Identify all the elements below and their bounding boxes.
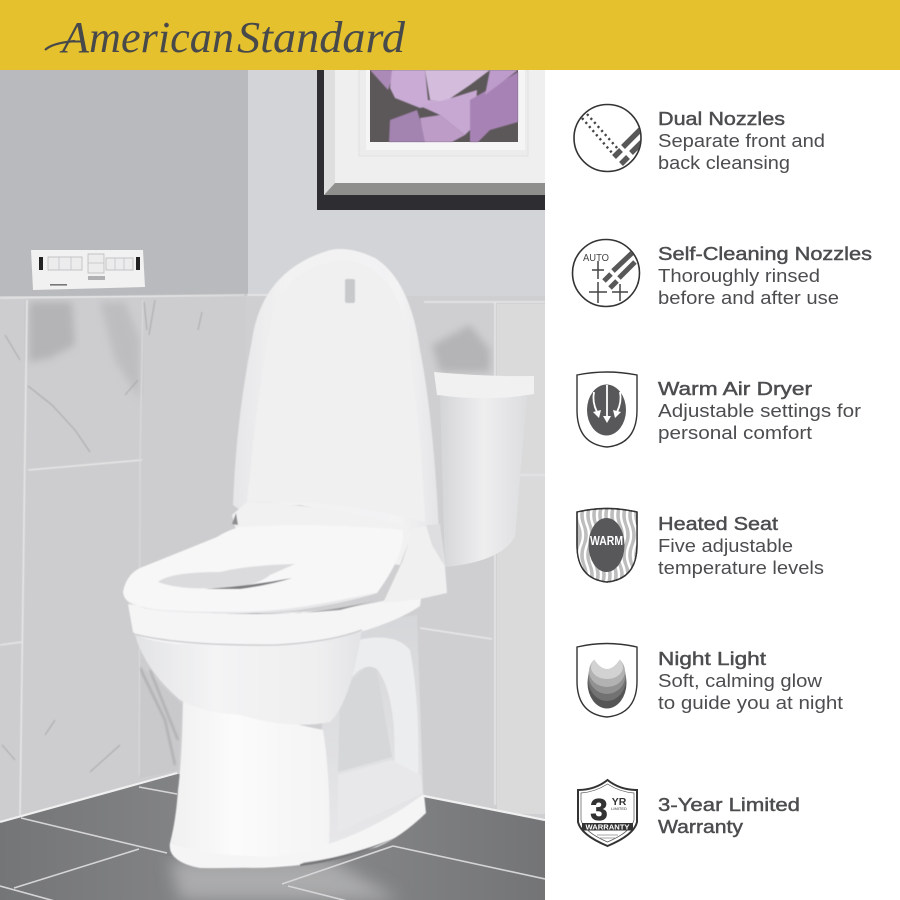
header band: [0, 0, 900, 70]
feature: warm air dryer: Warm Air Dryer: [658, 378, 812, 399]
left wall tiles: [0, 295, 248, 836]
raised lid: [233, 248, 439, 532]
feature: warranty: Warranty: [658, 816, 744, 837]
icon: heated seat: [577, 505, 637, 585]
logo: [45, 13, 406, 62]
bowl rim: [128, 598, 421, 644]
hinge housing: [384, 544, 448, 600]
icon: warranty badge: YR: [612, 796, 627, 808]
feature: night light: to guide you at night: [658, 693, 843, 713]
feature: dual nozzles: [658, 108, 825, 173]
feature: self-cleaning nozzles: [658, 243, 872, 308]
feature: warm air dryer: personal comfort: [658, 423, 812, 443]
floor: [0, 773, 545, 900]
feature: dual nozzles: Separate front and: [658, 131, 825, 151]
feature: night light: [658, 648, 843, 713]
icon: warranty badge: LIMITED: [611, 806, 627, 811]
back riser: [232, 502, 412, 565]
icon: self-cleaning nozzles: AUTO: [583, 253, 609, 264]
icon: warm air dryer: [577, 372, 637, 447]
feature: heated seat: Five adjustable: [658, 536, 793, 556]
seat: [123, 502, 447, 614]
feature: dual nozzles: back cleansing: [658, 153, 790, 173]
logo: American: [59, 13, 234, 62]
bowl and base: [128, 590, 426, 868]
seat ring: [123, 525, 403, 614]
feature: dual nozzles: Dual Nozzles: [658, 108, 785, 129]
rear trapway: [322, 618, 423, 844]
feature: warranty: [658, 794, 800, 837]
right wall tiles: [246, 295, 545, 826]
icon: self-cleaning nozzles: [572, 240, 640, 306]
feature: heated seat: Heated Seat: [658, 513, 778, 534]
bathroom photo: [0, 70, 545, 900]
flower: [370, 70, 518, 142]
icon: dual nozzles: [574, 104, 644, 172]
wall control panel: [31, 250, 145, 290]
feature: night light: Night Light: [658, 648, 766, 669]
bowl: [135, 628, 362, 725]
base band: [170, 794, 426, 868]
feature: self-cleaning nozzles: before and after use: [658, 288, 839, 308]
right wall: [248, 70, 545, 310]
framed art: [317, 70, 545, 210]
feature: warranty: 3-Year Limited: [658, 794, 800, 815]
icon: warranty badge: [578, 780, 637, 846]
icon: warranty badge: WARRANTY: [586, 824, 630, 832]
feature: self-cleaning nozzles: Self-Cleaning Nozzles: [658, 243, 872, 264]
feature: heated seat: [658, 513, 824, 578]
feature: heated seat: temperature levels: [658, 558, 824, 578]
feature: warm air dryer: Adjustable settings for: [658, 401, 861, 421]
left wall: [0, 70, 248, 296]
feature: warm air dryer: [658, 378, 861, 443]
icon: heated seat: WARM: [590, 534, 623, 548]
logo: Standard: [237, 13, 406, 62]
feature: self-cleaning nozzles: Thoroughly rinsed: [658, 266, 820, 286]
pedestal: [170, 700, 329, 868]
icon: warranty badge: 3: [590, 792, 608, 827]
feature: night light: Soft, calming glow: [658, 671, 823, 691]
bowl opening: [158, 564, 295, 588]
toilet tank: [434, 372, 534, 567]
icon: night light: [577, 644, 637, 717]
chrome gap: [230, 602, 368, 614]
